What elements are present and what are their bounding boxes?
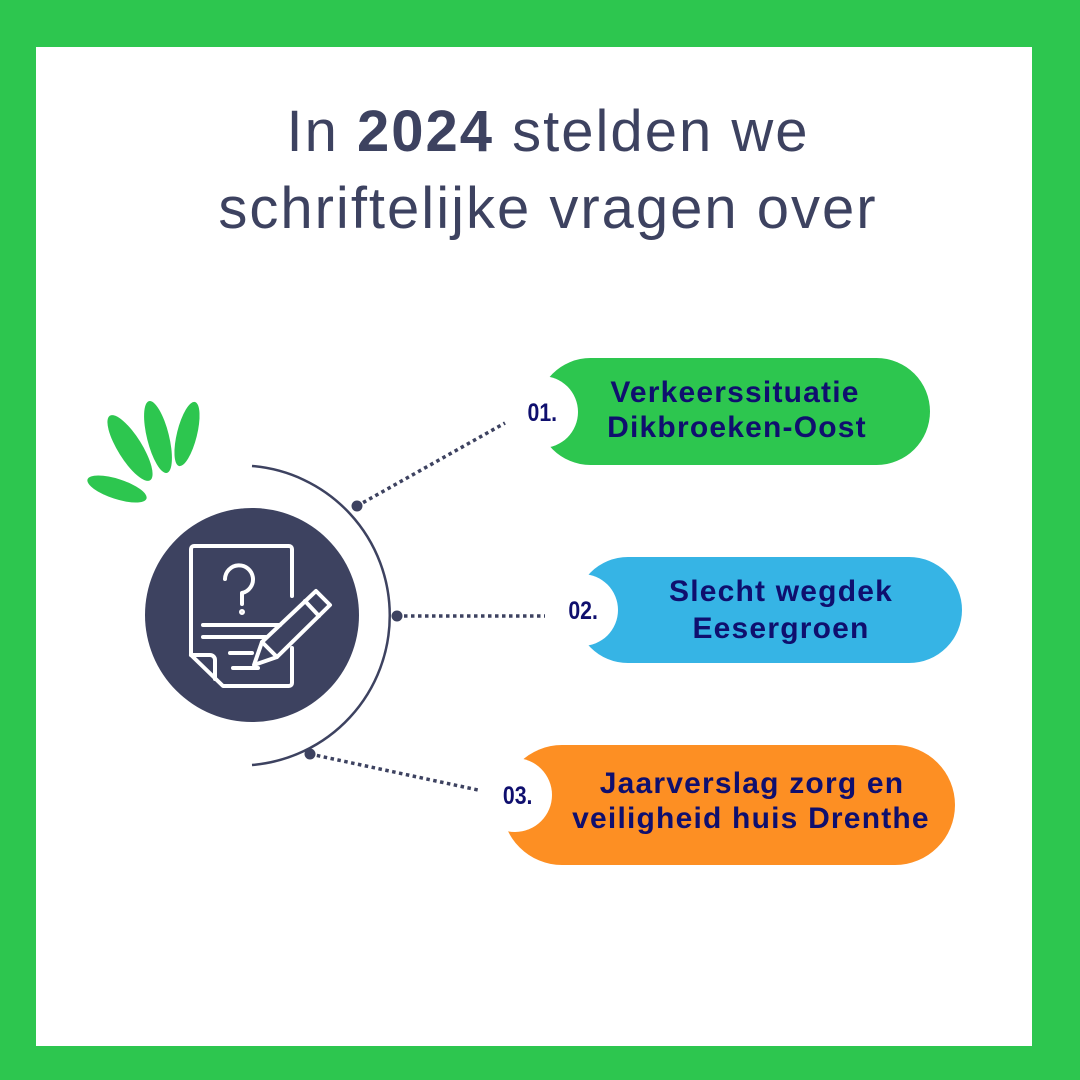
title: In 2024 stelden we xyxy=(287,99,809,164)
title xyxy=(218,99,878,241)
icon: question document with pencil xyxy=(145,508,359,722)
pill 2: 02. xyxy=(568,596,598,624)
pill 2 xyxy=(546,557,962,663)
pill 1: Dikbroeken-Oost xyxy=(607,411,867,444)
connectors xyxy=(310,423,545,790)
icon: green leaves xyxy=(84,398,205,508)
pill 3: 03. xyxy=(503,781,532,809)
pill 2: Eesergroen xyxy=(692,612,870,645)
arc xyxy=(252,466,390,765)
pill 2: Slecht wegdek xyxy=(669,575,893,608)
pill 3: veiligheid huis Drenthe xyxy=(572,802,930,835)
title: schriftelijke vragen over xyxy=(218,176,878,241)
pill 3: Jaarverslag zorg en xyxy=(600,767,904,800)
pill 1: 01. xyxy=(528,398,557,426)
pill 1: Verkeerssituatie xyxy=(610,376,860,409)
pill 3 xyxy=(478,745,955,865)
pill 1 xyxy=(506,358,930,465)
